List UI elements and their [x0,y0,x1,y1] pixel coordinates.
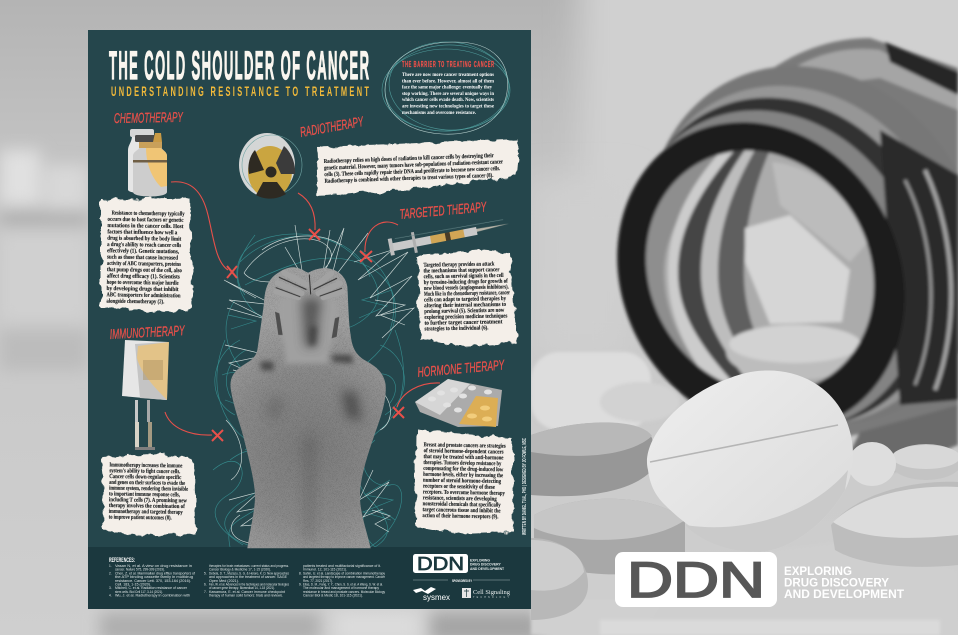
references column 1: the ATP binding cassette family in multidrug [115,575,193,579]
targeted therapy text: by tyrosine-inducing drugs for growth of [424,279,509,286]
icon: syringe [387,214,511,258]
logo: Cell Signaling Technology: Cell Signaling [473,589,511,596]
immunotherapy text: to improve patient outcomes (8). [109,514,172,522]
DDN tagline: EXPLORING [784,564,852,578]
references column 3: Elias, D. M., Fang, Y. Y., Chen, S. S. et al. A Wang, S. W. et al. [303,582,383,586]
references column 3: and targeted therapy to improve cancer management. Cancer [303,575,386,579]
logo: sysmex: sysmex [423,593,450,602]
bottle interior [643,147,877,386]
DDN tagline: AND DEVELOPMENT [784,587,905,601]
targeted therapy text: cells can adapt to targeted therapies by [424,296,506,304]
logo: Cell Signaling Technology: TECHNOLOGY [473,596,509,599]
icon: radiation symbol [239,133,302,199]
torn paper: hormone therapy [415,430,514,534]
torn paper: targeted therapy [417,250,517,346]
hormone therapy label: HORMONE THERAPY [417,356,506,380]
chemotherapy text: factors that influence how well a [107,229,177,236]
title: THE COLD SHOULDER OF CANCER [109,44,369,88]
immunotherapy label: IMMUNOTHERAPY [109,322,186,342]
targeted therapy text: new blood vessels (angiogenesis inhibitors). [424,283,509,292]
targeted therapy text: cells, such as survival signals in the cell [424,273,504,280]
arrow: hormone therapy to figure [393,383,440,418]
references column 2: Kawamura, E. et al. Cancer immune checkpoint [209,590,285,594]
immunotherapy text: including T cells (7). A promising new [109,496,188,504]
small DDN logo: AND DEVELOPMENT [470,567,505,571]
radiotherapy label: RADIOTHERAPY [299,113,365,140]
icon: blister packs [415,379,502,427]
references column 1: Cell. 183, 1-15 (2020). [115,582,151,586]
small DDN logo: EXPLORING [470,558,490,562]
radiotherapy text: Radiotherapy is combined with other therapies to treat various types of cancer (8). [324,172,494,185]
references column 2: Fan, W. et al. Advances in the techniques and molecular biologies [209,582,289,586]
credits: vertical text: WRITTEN BY DANIEL TUAL, PHD | DESIGNED BY JO FOWLE, MSC [522,438,528,535]
callout body: mechanisms and overcome resistance. [402,110,476,116]
hormone therapy text: that may be treated with anti-hormone [423,454,504,461]
chemotherapy text: by developing drugs that inhibit [107,286,179,293]
references column 3: Cancer Biol & Medic 18, 101-115 (2021). [303,594,363,598]
chemotherapy label: CHEMOTHERAPY [114,109,184,126]
arrow: targeted therapy to figure [360,222,398,262]
hormone therapy text: target cancerous tissue and inhibit the [423,507,501,515]
immunotherapy text: immune system, rendering them invisible [109,486,188,493]
panel: targeted therapy [360,198,517,346]
callout body: than ever before. However, almost all of them [402,78,494,84]
chemotherapy text: such as those that cause increased [107,255,179,262]
chemotherapy text: mutations in the cancer cells. Host [107,223,183,230]
targeted therapy text: the mechanisms that support cancer [423,267,500,275]
chemotherapy text: ABC transporters for administration [106,292,181,299]
references column 1: Chen, Z. et al. Mammalian drug efflux transporters of [115,571,195,575]
panel: hormone therapy [393,356,514,534]
hormone therapy text: compensating for the drug-induced low [423,466,504,473]
hormone therapy text [422,442,506,521]
immunotherapy text: to important immune response cells, [109,491,180,498]
logo: Cell Signaling Technology [462,588,511,599]
immunotherapy text: therapy involves the combination of [109,503,186,510]
icon: vial [128,129,167,196]
immunotherapy text: and genes on their surfaces to evade the [109,480,185,487]
foreground tablets [890,444,958,480]
callout body: stop working. There are several unique ways in [402,91,495,97]
poster [88,30,531,609]
hormone therapy text: number of steroid hormone-detecting [423,478,501,485]
subtitle: UNDERSTANDING RESISTANCE TO TREATMENT [111,85,369,100]
hormone therapy text: resistance, scientists are developing [423,495,497,503]
immunotherapy text: Immunotherapy increases the immune [109,462,183,469]
radiotherapy text: genetic material. However, many tumors have sub-populations of radiation-resistant cancer [324,159,503,172]
references heading: REFERENCES: [109,558,135,564]
targeted therapy text: altering their internal mechanisms to [424,302,506,309]
targeted therapy text: exploring precision medicine techniques [424,313,508,321]
references column 2: Debela, D. T., Muzazu, S. G. & Heraro, K. D. New approaches [209,571,289,575]
targeted therapy text: prolong survival (5). Scientists are now [424,307,505,315]
small DDN logo [413,554,505,574]
chemotherapy text: drug is absorbed by the body limit [107,236,181,243]
references column 2: and approaches in the treatment of cancer. SAGE [209,575,287,579]
blurred background tablets [531,352,651,430]
chemotherapy text: that pump drugs out of the cell, also [107,267,182,274]
panel: radiotherapy [239,113,519,240]
references column 1: Mitchell, C. et al. Radiation resistance of cancer [115,586,188,590]
footer logos [413,554,511,602]
DDN tagline: DRUG DISCOVERY [784,576,889,590]
references column 1: 2. [109,571,112,575]
chemotherapy text: activity of ABC transporters, proteins [107,261,181,268]
references column 1: stem cells. Biol Cell 117, 3-14 (2021). [115,590,163,594]
immunotherapy text: system's ability to fight cancer cells. [109,468,181,475]
chemotherapy text: hope to overcome this major hurdle [107,280,179,287]
targeted therapy text: strategies to the individual (6). [424,324,489,333]
references column 3: 8. [299,571,302,575]
icon: IV bag and syringes [122,340,169,450]
references column 3 [299,564,386,598]
hormone therapy text: receptors. To overcome hormone therapy [423,489,505,497]
footer band [88,547,531,609]
references column 3: Res. 77, 2021 (2017). [303,579,333,583]
references column 2: therapies for brain metastases: current status and progress. [209,564,289,568]
references column 2: 6. [204,582,207,586]
chemotherapy text [106,210,185,306]
scribble lines behind figure [213,225,414,547]
immunotherapy text: Cancer cells down-regulate specific [109,474,182,481]
hormone therapy text: Breast and prostate cancers are strategies [424,442,506,450]
arrow: radiotherapy to figure [298,193,320,240]
references column 1: 1. [109,564,112,568]
torn paper: immunotherapy [102,454,195,536]
callout heading: THE BARRIER TO TREATING CANCER [402,61,494,70]
radiotherapy text: Radiotherapy relies on high doses of radiation to kill cancer cells by destroying their [324,153,494,165]
references column 3: resistance in breast and prostate cancers. Molecular Biology [303,590,385,594]
bottle rim [561,69,958,485]
sponsored by: SPONSORED BY [452,578,472,583]
references column 2: of cancer gene therapy. Biomedical 14, 1-18 (2021). [209,586,275,590]
small DDN logo: DRUG DISCOVERY [470,563,502,567]
intro callout: the barrier to treating cancer [382,38,512,134]
hormone therapy text: receptors or the sensitivity of these [423,484,495,491]
references column 3: The molecular and management of hormone therapy [303,586,379,590]
references column 1: 4. [109,594,112,598]
references [109,558,386,598]
chemotherapy text: alongside chemotherapy (2). [106,298,165,305]
panel: chemotherapy [101,109,237,312]
central figure: back of person holding head [230,267,386,548]
hormone therapy text: action of their hormone receptors (9). [422,512,499,520]
immunotherapy text [109,462,189,522]
chemotherapy text: a drug's ability to reach cancer cells [107,242,182,249]
references column 1: Vasan N, et al. A view on drug resistance in [115,564,192,568]
immunotherapy text: immunotherapy and targeted therapy [109,509,183,516]
small DDN logo: DDN [417,554,464,574]
references column 2 [204,564,289,598]
callout body: face the same major challenge: eventually they [402,85,492,91]
large DDN logo [615,552,905,608]
references column 2: 5. [204,571,207,575]
references column 3: Sahin, U. et al. Landscape of combination immunotherapy [303,571,385,575]
references column 3: patients treated and multifactorial significance of it. [303,564,381,568]
large DDN logo: DDN [627,552,765,608]
arrow: immunotherapy to figure [165,412,223,441]
hormone therapy text: nonsteroidal chemicals that specifically [423,501,501,509]
references column 2: 7. [204,590,207,594]
radiotherapy text [324,153,504,185]
bottle body [720,38,958,436]
hands clasped on head [276,273,343,297]
references column 2: therapy of human solid tumors: trials and reviews. [209,594,283,598]
targeted therapy text: Much like in the chemotherapy resistance, cancer [424,290,510,298]
references column 3: 9. [299,582,302,586]
hormone therapy text: hormone levels, either by increasing the [423,472,503,479]
hormone therapy text: of steroid hormone-dependent cancers [424,448,504,456]
targeted therapy text: Targeted therapy provides an attack [423,261,495,269]
callout body [402,72,495,116]
chemotherapy text: affect drug efficacy (1). Scientists [107,272,180,280]
head and neck [278,296,338,363]
torn paper: chemotherapy [101,198,193,312]
references column 1: 3. [109,586,112,590]
references column 3: Immunol. 12, 101-115 (2021). [303,568,347,572]
callout body: are investing new technologies to target these [402,104,494,110]
callout body: There are now more cancer treatment options [402,72,495,78]
references column 1: resistance. Cancer Lett. 370, 153-164 (2016). [115,579,191,583]
targeted therapy text: to further target cancer treatment [424,319,502,327]
references column 1: Wu, J. et al. Radiotherapy in combination with [115,594,190,598]
panel: immunotherapy [102,322,223,536]
chemotherapy text: effectively (1). Genetic mutations, [107,247,180,255]
references column 1: cancer. Nature 575, 299-309 (2019). [115,568,165,572]
radiotherapy text: cells (3). These cells rapidly repair their DNA and proliferate to become new cancer cells. [324,165,501,178]
targeted therapy label: TARGETED THERAPY [399,198,488,222]
references column 2: Cancer Biology & Medicine 17, 1-15 (2020). [209,568,271,572]
hormone therapy text: therapies. Tumors develop resistance by [423,460,501,467]
references column 1 [109,564,195,598]
callout body: which cancer cells evade death. Now, scientists [402,97,495,103]
references column 2: Open Med (2021). [209,579,239,583]
chemotherapy text: occurs due to host factors or genetic [107,217,184,224]
torn paper: radiotherapy [316,139,519,196]
chemotherapy text: Resistance to chemotherapy typically [112,211,185,218]
targeted therapy text [423,261,511,333]
arrow: chemotherapy to figure [171,182,237,278]
